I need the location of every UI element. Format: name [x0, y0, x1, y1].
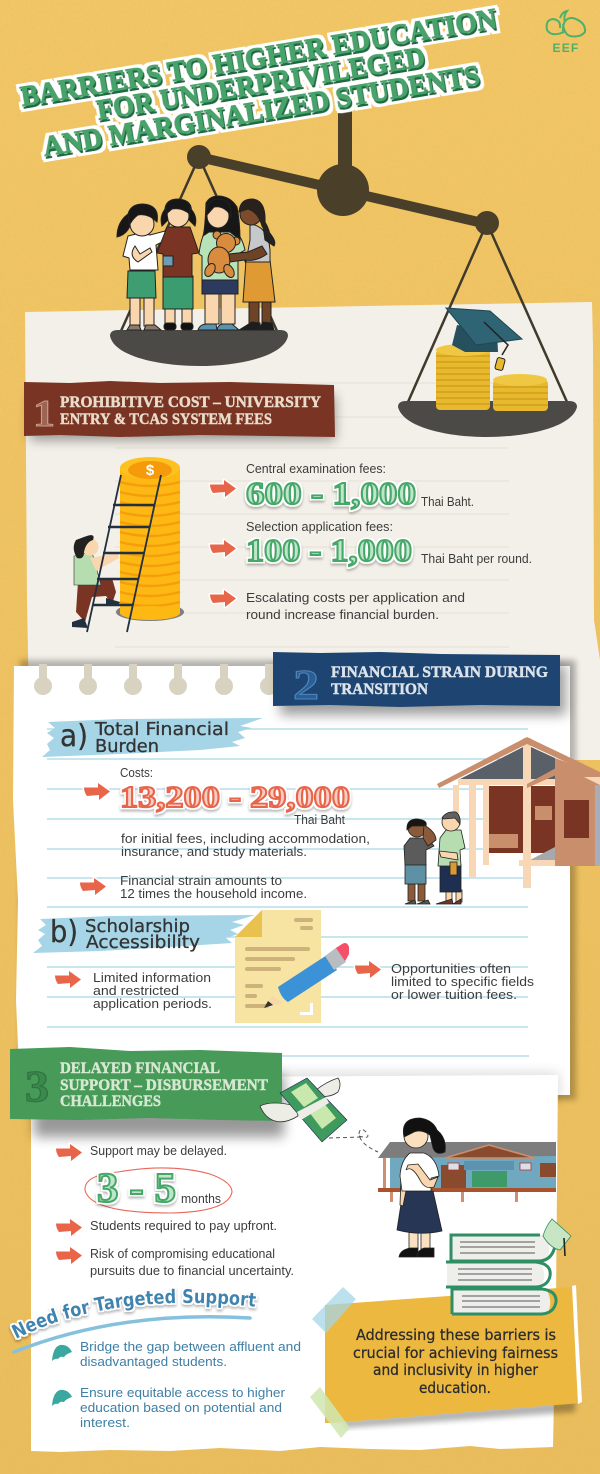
arrow: [210, 480, 236, 497]
illustration: stacked books with cap: [446, 1219, 571, 1314]
scale stand and beam: [121, 108, 567, 402]
section 3 heading: SUPPORT – DISBURSEMENT: [60, 1077, 268, 1094]
escalating costs: [246, 590, 465, 622]
student three: [198, 196, 245, 330]
selection application fees: [246, 519, 532, 568]
section 3 number: 3: [25, 1062, 49, 1111]
section 1 heading: ENTRY & TCAS SYSTEM FEES: [60, 411, 272, 428]
delay details: pursuits due to financial uncertainty.: [90, 1263, 294, 1278]
illustration: wooden house: [437, 737, 600, 888]
limited information point: Limited information: [93, 970, 211, 985]
arrow: [56, 1219, 82, 1236]
ladder: [87, 475, 161, 632]
opportunities point: limited to specific fields: [391, 974, 535, 989]
top book: [451, 1235, 555, 1261]
green tape: [310, 1387, 350, 1438]
delay duration: months: [181, 1191, 221, 1206]
costs block: Costs:: [120, 765, 153, 780]
dashed flight path: [329, 1129, 378, 1152]
opportunities point: [355, 961, 535, 1002]
escalating costs: round increase financial burden.: [246, 607, 439, 622]
section 2 banner: [273, 652, 566, 715]
fee list: [210, 461, 532, 622]
section 2 heading: FINANCIAL STRAIN DURING: [331, 664, 549, 681]
bullet icon: [52, 1345, 72, 1361]
arrow: [210, 590, 236, 607]
arrow: [84, 783, 110, 800]
delay details: Students required to pay upfront.: [90, 1218, 277, 1233]
escalating costs: Escalating costs per application and: [246, 590, 465, 605]
illustration: rural school building: [378, 1142, 556, 1202]
section 2 number: 2: [293, 663, 319, 709]
graduation cap: [446, 308, 522, 371]
middle book: [446, 1262, 550, 1287]
subheading b: scholarship accessibility: Scholarship: [85, 916, 190, 937]
illustration: document and pencil: [235, 910, 349, 1023]
student four: [229, 199, 275, 330]
costs block: [84, 765, 370, 859]
arrow: [210, 540, 236, 557]
left scale pan: [110, 330, 288, 366]
delay details: Risk of compromising educational: [90, 1246, 275, 1261]
targeted support bullets: interest.: [80, 1415, 130, 1430]
targeted support bullets: Bridge the gap between affluent and: [80, 1339, 301, 1354]
conclusion note: [310, 1285, 582, 1438]
subheading b: scholarship accessibility: b): [50, 915, 78, 950]
illustration: four students: [117, 196, 275, 330]
coin tower: $: [146, 462, 155, 479]
title: BARRIERS TO HIGHER EDUCATION: [18, 3, 499, 113]
section 3 heading: [60, 1060, 268, 1110]
logo: EEF: EEF: [553, 41, 579, 55]
delay details: [56, 1143, 294, 1278]
targeted support bullets: [52, 1339, 301, 1430]
coin tower: [120, 457, 180, 620]
targeted support bullets: disadvantaged students.: [80, 1354, 227, 1369]
costs block: for initial fees, including accommodation,: [121, 831, 370, 846]
section 1 banner: [24, 381, 335, 440]
section 1 heading: PROHIBITIVE COST – UNIVERSITY: [60, 394, 321, 411]
selection application fees: Thai Baht per round.: [421, 551, 532, 566]
small coin stack: [493, 374, 548, 411]
section 3 heading: CHALLENGES: [60, 1093, 161, 1110]
targeted support bullets: education based on potential and: [80, 1400, 282, 1415]
subheading a: total financial burden: a): [60, 719, 88, 754]
conclusion text: [353, 1326, 558, 1397]
section 3 banner: [10, 1047, 284, 1137]
delay details: Support may be delayed.: [90, 1143, 227, 1158]
costs block: insurance, and study materials.: [121, 844, 307, 859]
central examination fees: 600 - 1,000: [246, 475, 416, 511]
title: [18, 3, 508, 165]
person left: [404, 819, 436, 904]
bullet icon: [52, 1390, 72, 1406]
mini graduation cap: [543, 1219, 571, 1256]
panel: delayed support torn paper: [31, 1072, 560, 1452]
subheading b: scholarship accessibility: [33, 915, 255, 953]
subheading a: total financial burden: [42, 718, 263, 757]
section 1 number: 1: [33, 393, 55, 435]
limited information point: and restricted: [93, 983, 179, 998]
household income point: [80, 873, 307, 901]
student one: [117, 204, 166, 330]
climber: [72, 535, 120, 628]
panel: prohibitive cost paper: [25, 302, 600, 760]
person right: [436, 812, 465, 904]
limited information point: application periods.: [93, 996, 212, 1011]
household income point: Financial strain amounts to: [120, 873, 282, 888]
heading: need for targeted support: Need for Targeted Support: [8, 1288, 259, 1343]
student two: [157, 199, 199, 330]
targeted support bullets: Ensure equitable access to higher: [80, 1385, 286, 1400]
panel: financial strain notebook page: [13, 660, 576, 1100]
central examination fees: Thai Baht.: [421, 494, 474, 509]
arrow: [56, 1144, 82, 1161]
right scale pan: [398, 401, 577, 437]
central examination fees: [246, 461, 474, 511]
cost range: 13,200 - 29,000: [120, 779, 350, 814]
section 3 heading: DELAYED FINANCIAL: [60, 1060, 220, 1077]
delay duration: 3 - 5: [97, 1166, 176, 1212]
selection application fees: Selection application fees:: [246, 519, 393, 534]
blue tape: [312, 1287, 356, 1333]
costs block: Thai Baht: [294, 812, 345, 827]
arrow: [56, 1247, 82, 1264]
large coin stack: [436, 344, 490, 410]
subheading a: total financial burden: Burden: [95, 736, 159, 757]
conclusion text: education.: [419, 1379, 491, 1397]
bottom book: [452, 1289, 556, 1314]
conclusion text: Addressing these barriers is: [356, 1326, 556, 1344]
title: AND MARGINALIZED STUDENTS: [41, 59, 482, 163]
central examination fees: Central examination fees:: [246, 461, 386, 476]
conclusion text: crucial for achieving fairness: [353, 1344, 558, 1362]
illustration: flying money: [260, 1078, 347, 1142]
household income point: 12 times the household income.: [120, 886, 307, 901]
title: FOR UNDERPRIVILEGED: [94, 41, 427, 127]
section 2 heading: [331, 664, 549, 698]
logo: EEF: [547, 11, 585, 55]
section 1 heading: [60, 394, 321, 428]
subheading b: scholarship accessibility: Accessibility: [86, 932, 200, 953]
opportunities point: Opportunities often: [391, 961, 511, 976]
notebook binding holes: [34, 664, 278, 695]
conclusion text: and inclusivity in higher: [373, 1361, 539, 1379]
opportunities point: or lower tuition fees.: [391, 987, 517, 1002]
selection application fees: 100 - 1,000: [246, 532, 412, 568]
subheading a: total financial burden: Total Financial: [94, 719, 229, 740]
section 2 heading: TRANSITION: [331, 681, 428, 698]
illustration: student in uniform: [397, 1118, 445, 1257]
delay duration: [85, 1166, 232, 1213]
illustration: two worried people: [404, 812, 465, 904]
limited information point: [55, 970, 212, 1011]
illustration: coins and graduation cap: [436, 308, 548, 411]
illustration: person climbing ladder on coin stack: [72, 457, 184, 632]
